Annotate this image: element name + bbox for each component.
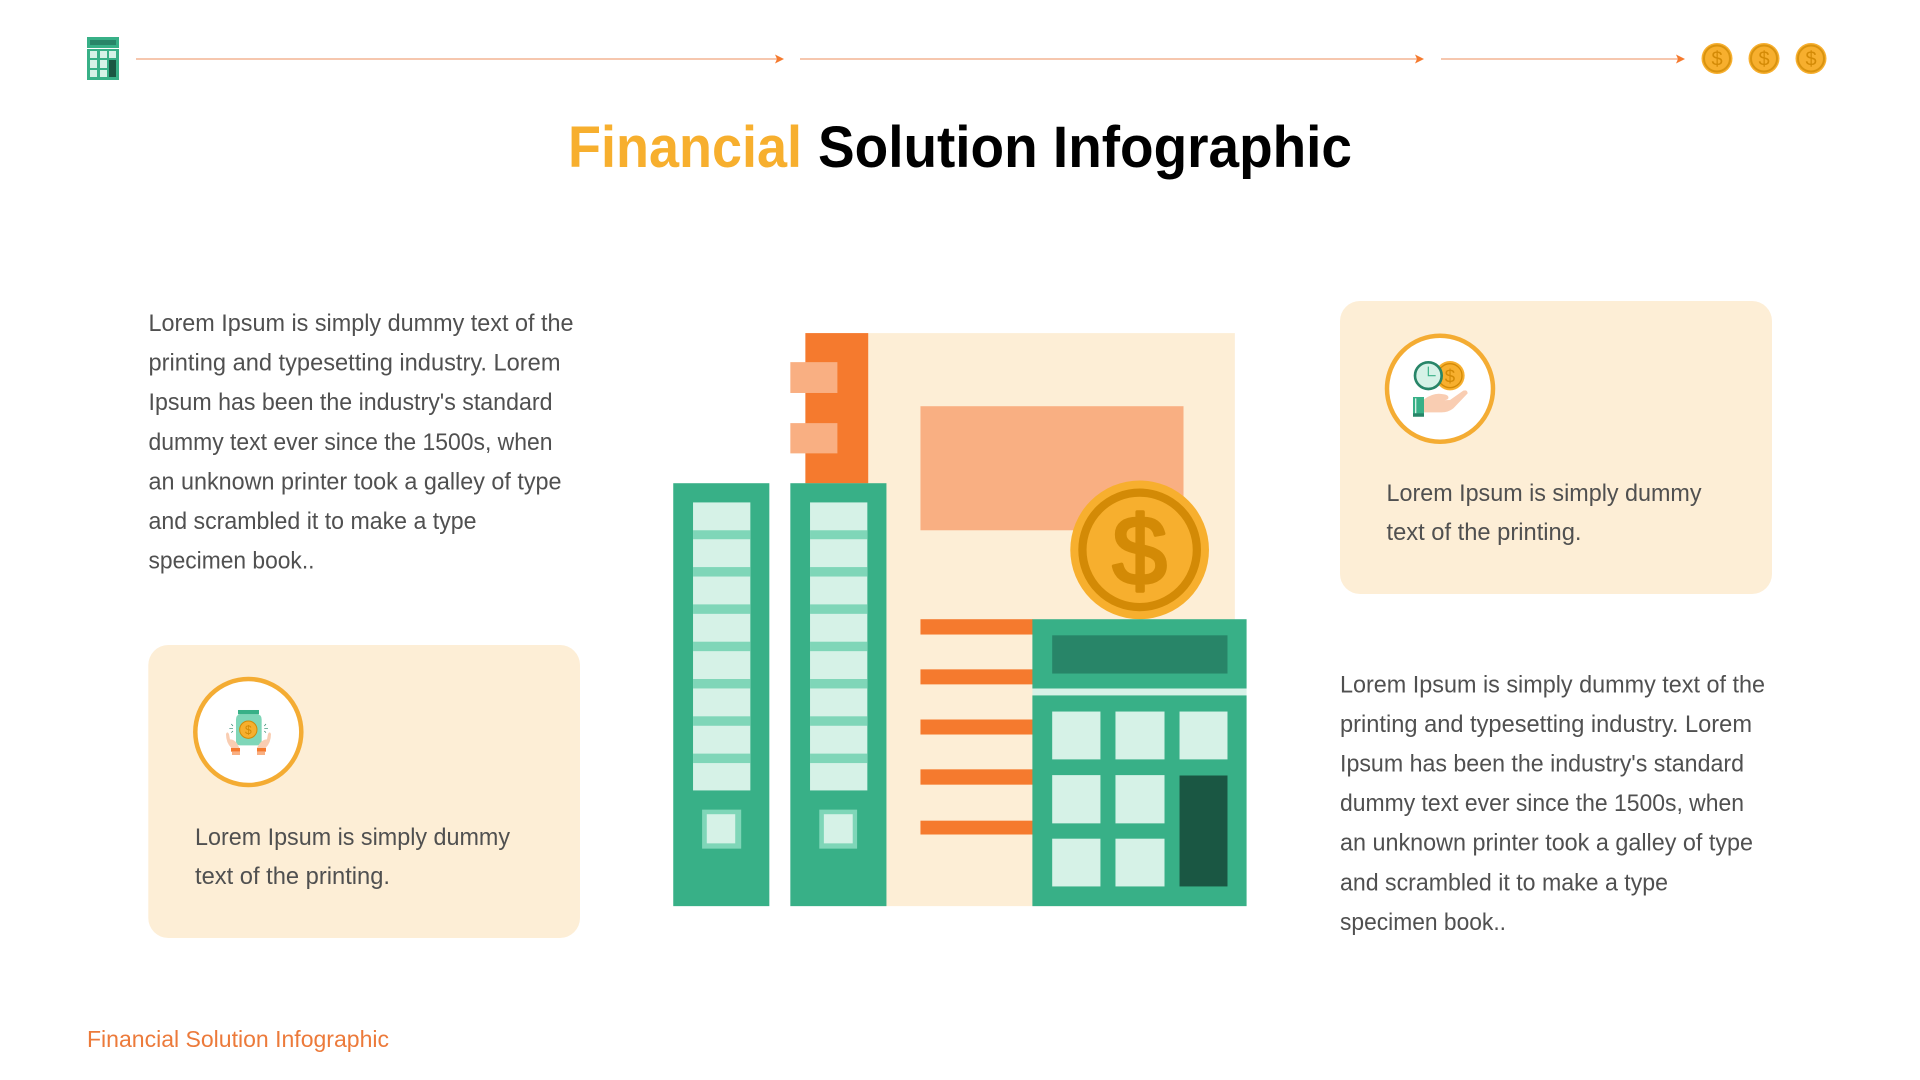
text block: right paragraph xyxy=(1340,671,1765,936)
icon: small calculator xyxy=(87,37,119,80)
icon: hands holding jar xyxy=(195,679,301,785)
text: left card body: Lorem Ipsum is simply dummy xyxy=(195,824,510,851)
text block: right paragraph: and scrambled it to make a type xyxy=(1340,869,1668,896)
text block: right paragraph: printing and typesetting industry. Lorem xyxy=(1340,711,1752,738)
binder right xyxy=(790,483,886,906)
text block: left paragraph: dummy text ever since the 1500s, when xyxy=(148,429,552,456)
text block: left paragraph: Lorem Ipsum is simply dummy text of the xyxy=(148,310,574,337)
text block: left paragraph: Ipsum has been the industry's standard xyxy=(148,389,552,416)
text block: left paragraph xyxy=(148,310,574,575)
icon: coin one: $ xyxy=(1711,48,1723,70)
text: left card body xyxy=(195,824,510,890)
notebook tab upper xyxy=(790,362,837,393)
illustration: finance books, notebook and calculator xyxy=(673,333,1247,906)
icon: hand with clock and coin: $ xyxy=(1445,365,1456,386)
arrow: first segment xyxy=(136,54,784,64)
arrow: second segment xyxy=(800,54,1424,64)
title: Solution Infographic xyxy=(818,115,1352,180)
icon: coin one xyxy=(1702,43,1732,74)
text block: right paragraph: Lorem Ipsum is simply dummy text of the xyxy=(1340,671,1765,698)
large dollar coin: $ xyxy=(1113,496,1167,605)
icon: coin two: $ xyxy=(1758,48,1770,70)
text: left card body: text of the printing. xyxy=(195,863,390,890)
text block: right paragraph: an unknown printer took a galley of type xyxy=(1340,830,1753,857)
text block: right paragraph: Ipsum has been the industry's standard xyxy=(1340,750,1744,778)
text: right card body: text of the printing. xyxy=(1386,519,1582,546)
large dollar coin xyxy=(1070,481,1209,619)
text block: left paragraph: printing and typesetting industry. Lorem xyxy=(148,350,560,377)
text block: left paragraph: and scrambled it to make a type xyxy=(148,508,476,535)
title: Financial xyxy=(568,115,802,180)
notebook page xyxy=(868,333,1235,906)
text block: left paragraph: an unknown printer took a galley of type xyxy=(148,468,562,495)
notebook text lines xyxy=(920,619,1033,835)
footer label: Financial Solution Infographic xyxy=(87,1026,389,1052)
arrow: third segment xyxy=(1441,54,1685,64)
icon: coin three: $ xyxy=(1805,48,1817,70)
notebook tab lower xyxy=(790,423,837,453)
text: right card body: Lorem Ipsum is simply dummy xyxy=(1386,480,1702,507)
text block: right paragraph: dummy text ever since the 1500s, when xyxy=(1340,790,1744,817)
panel: right card xyxy=(1340,301,1772,594)
calculator xyxy=(1032,619,1247,906)
notebook image block xyxy=(920,406,1184,530)
title xyxy=(568,115,1352,180)
binder left xyxy=(673,483,769,906)
text block: right paragraph: specimen book.. xyxy=(1340,909,1506,936)
text block: left paragraph: specimen book.. xyxy=(148,548,314,575)
icon: hands holding jar: $ xyxy=(245,723,252,737)
notebook spine xyxy=(805,333,868,483)
icon: coin three xyxy=(1796,43,1826,74)
icon: coin two xyxy=(1748,43,1780,74)
panel: left card xyxy=(148,645,580,938)
text: right card body xyxy=(1386,480,1702,546)
icon: hand with clock and coin xyxy=(1387,336,1493,442)
